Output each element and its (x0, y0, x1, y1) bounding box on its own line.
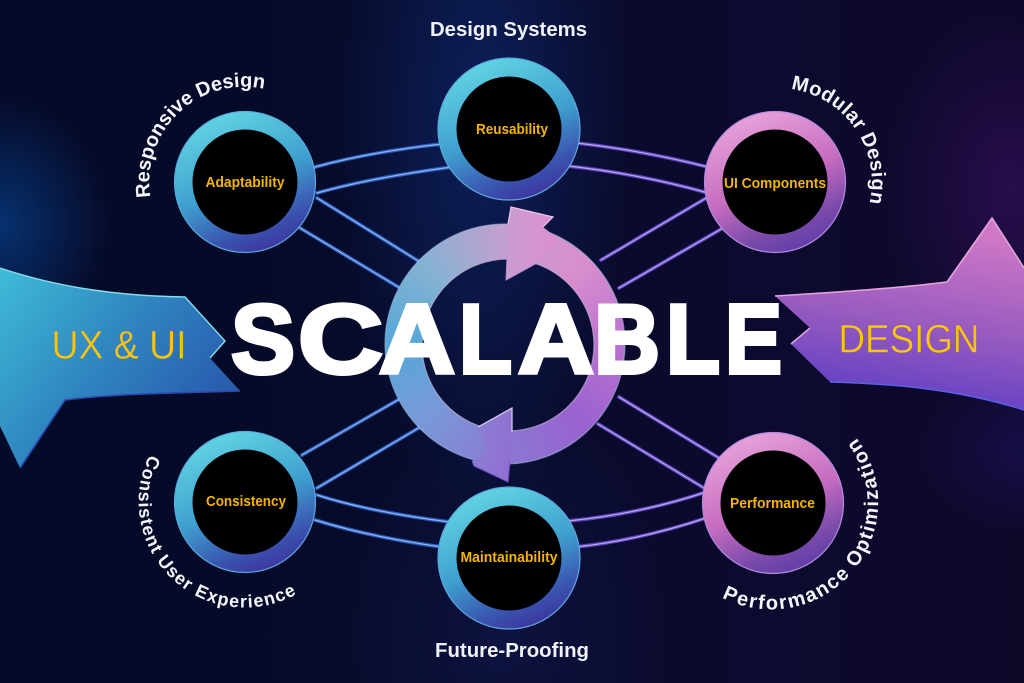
ribbon arrow: UX & UI (0, 268, 240, 468)
arrow head: bottom (472, 408, 512, 482)
central circular arrows (385, 207, 625, 482)
title: SCALABLE: L (459, 284, 512, 394)
connector lines: left side (300, 144, 452, 547)
connector lines: right side (568, 143, 723, 547)
title: SCALABLE: E (725, 284, 782, 394)
node: Maintainability (438, 487, 580, 629)
curved label: Consistent User Experience: Consistent User Experience (138, 456, 295, 608)
title: SCALABLE: C (298, 284, 383, 394)
node: Reusability (438, 58, 580, 200)
title: SCALABLE: A (518, 284, 594, 394)
node: Performance (702, 432, 844, 574)
title: SCALABLE: B (594, 284, 660, 394)
node: Adaptability: Adaptability (206, 175, 284, 191)
ribbon label: DESIGN: DESIGN (838, 318, 980, 362)
ribbon arrow: DESIGN (775, 218, 1024, 410)
node: Consistency: Consistency (206, 494, 286, 510)
title: SCALABLE (231, 284, 782, 394)
ribbon label: UX & UI: UX & UI (52, 324, 186, 368)
node: UI Components (704, 112, 846, 252)
node: Consistency (174, 432, 316, 572)
node: Reusability: Reusability (476, 122, 548, 138)
title: SCALABLE: S (231, 284, 295, 394)
node: Performance: Performance (730, 496, 815, 512)
title: SCALABLE: A (379, 284, 455, 394)
curved label: Responsive Design: Responsive Design (136, 72, 264, 197)
title: SCALABLE: L (666, 284, 720, 394)
curved label: Performance Optimization: Performance Optimization (723, 438, 878, 610)
node: Maintainability: Maintainability (460, 550, 558, 566)
heading: Future-Proofing: Future-Proofing (435, 640, 589, 662)
heading: Design Systems: Design Systems (430, 19, 587, 41)
curved label: Modular Design: Modular Design (792, 76, 886, 204)
node: UI Components: UI Components (724, 176, 826, 192)
arrow head: top (506, 207, 560, 280)
node: Adaptability (174, 112, 316, 252)
